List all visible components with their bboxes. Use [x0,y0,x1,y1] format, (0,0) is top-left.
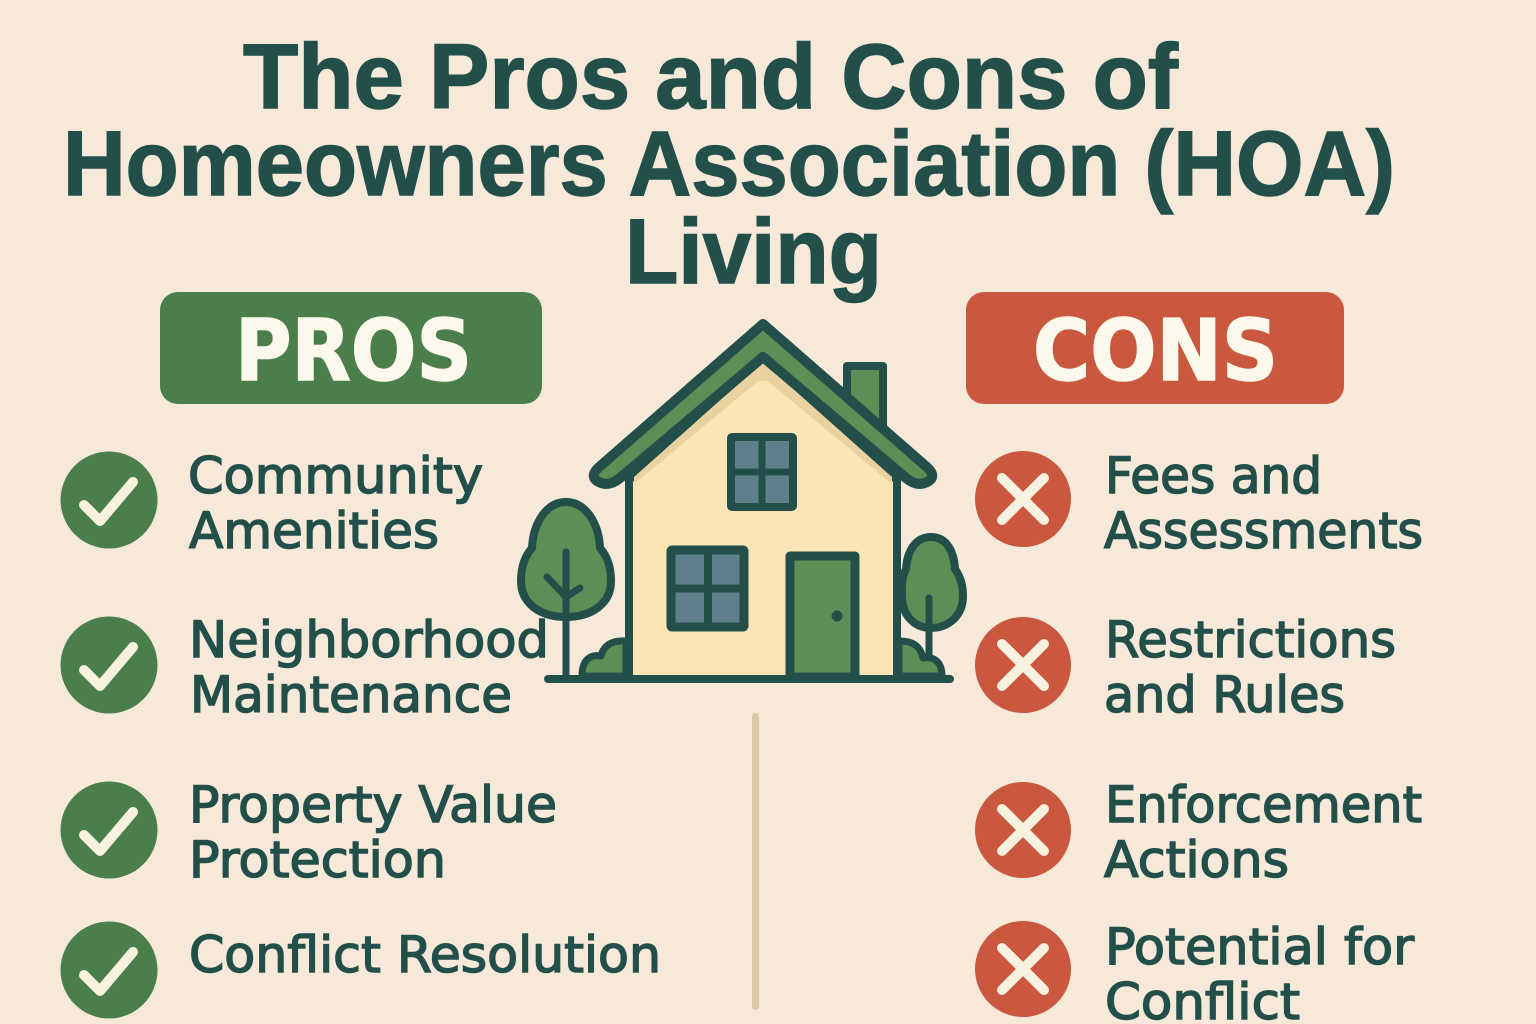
pro: conflict resolution: Conflict Resolution [189,926,661,984]
panel: cons list [975,447,1423,1024]
divider [752,713,759,1010]
icon: right bush [899,641,942,676]
pro: community amenities: Community [188,447,483,505]
panel: pros header [160,292,542,404]
title: Homeowners Association (HOA) [63,113,1395,215]
con: enforcement actions: Actions [1104,831,1289,889]
door [790,556,855,677]
pro: community amenities [60,447,483,560]
ground line [548,675,950,683]
con: fees and assessments: Assessments [1104,502,1423,560]
pro: community amenities: Amenities [189,502,439,560]
pro: conflict resolution [60,922,661,1018]
con: enforcement actions [975,776,1422,889]
pro: property value protection: Protection [189,831,446,889]
title: Living [625,201,882,303]
title: The Pros and Cons of [243,26,1178,128]
con: restrictions and rules [975,611,1396,724]
icon: house illustration [521,324,963,679]
icon: left tree [521,502,611,679]
pro: neighborhood maintenance [60,611,549,724]
panel: pros list [60,447,661,1018]
icon: left bush [582,641,626,676]
icon: chimney [847,366,883,430]
icon: right tree [902,537,963,679]
title [63,26,1395,303]
lower window [671,550,744,627]
con: fees and assessments [975,447,1423,560]
roof [594,324,932,484]
upper window [731,437,793,507]
panel: pros header: PROS [235,302,472,401]
panel: cons header [966,292,1344,404]
house wall [629,360,897,679]
pro: property value protection [60,776,557,889]
pro: neighborhood maintenance: Maintenance [190,666,512,724]
con: enforcement actions: Enforcement [1105,776,1422,834]
roof shadow [634,362,892,484]
panel: cons header: CONS [1033,302,1278,401]
con: potential for conflict: Potential for [1105,918,1414,976]
con: potential for conflict [975,918,1414,1024]
pro: property value protection: Property Value [189,776,557,834]
con: fees and assessments: Fees and [1105,447,1322,505]
pro: neighborhood maintenance: Neighborhood [189,611,549,669]
con: restrictions and rules: and Rules [1104,666,1345,724]
con: restrictions and rules: Restrictions [1105,611,1396,669]
